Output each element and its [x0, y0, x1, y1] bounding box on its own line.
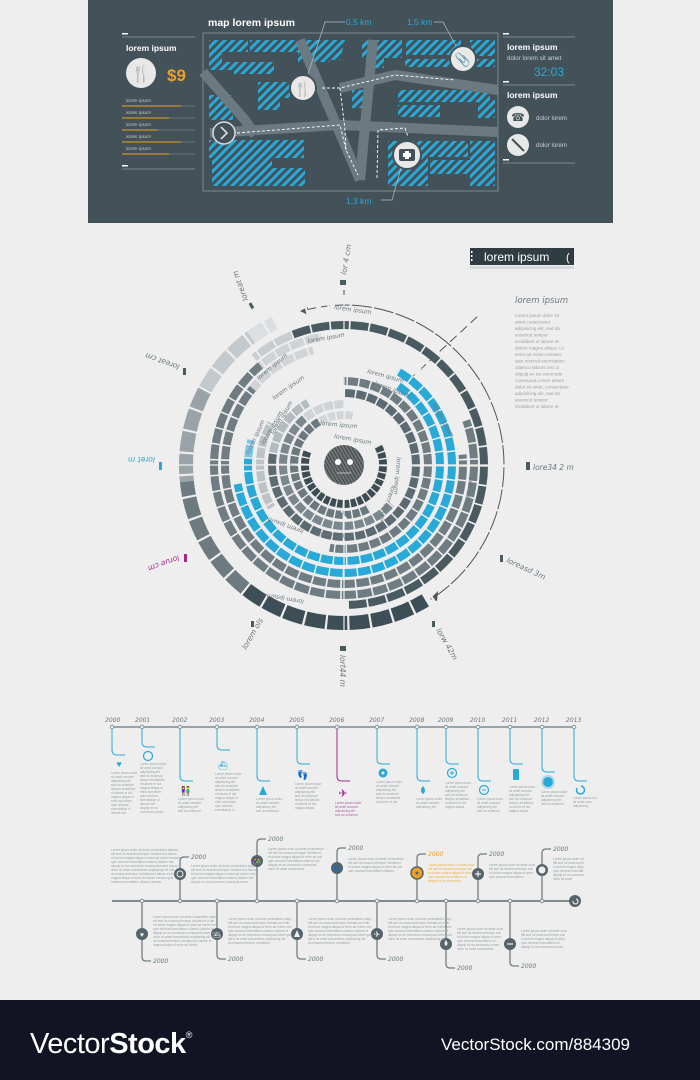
timeline 1 captions: Lorem ipsum dolor	[416, 797, 443, 801]
timeline 1 captions: adipisicing elit	[178, 805, 198, 809]
timeline 1: years: 2011	[502, 717, 517, 724]
radial annotations: loreat m	[231, 270, 250, 302]
timeline 1 captions: adipisicing	[573, 804, 588, 808]
timeline 1 captions: sit amet consect	[541, 794, 564, 798]
text block: right description: lorem ipsum	[515, 296, 568, 306]
timeline 1 captions: quis nostrud	[215, 804, 233, 808]
timeline 1 captions: Lorem ipsum dolor	[509, 785, 536, 789]
timeline 1 captions: sed do eiusmod	[335, 813, 358, 817]
timeline 2 text blocks: dolor sit amet consectetur adipisicing elit	[388, 937, 445, 941]
radial annotations: loret m	[128, 455, 155, 464]
timeline 1: years: 2009	[438, 717, 453, 724]
timeline 1 captions: Lorem ipsum dolor	[295, 782, 322, 786]
timeline 1 captions	[111, 762, 597, 817]
timeline 1 captions: commodo conse	[140, 810, 164, 814]
timeline 2 text blocks: elit sed do eiusmod tempor inci	[489, 867, 533, 871]
icon: restaurant pin: 🍴	[294, 81, 312, 98]
timeline 1 icons	[116, 752, 584, 800]
timeline 2 text blocks: et dolore magna aliqu	[553, 865, 584, 869]
timeline 2 text blocks: et dolore magna aliqua ut enim ad minim ven	[153, 923, 217, 927]
panel: map dashboard	[88, 0, 613, 223]
timeline 1 captions: sed do eiusmod	[215, 784, 238, 788]
radial annotations: loreat cm	[144, 351, 181, 372]
heading tag: lorem ipsum	[470, 248, 574, 269]
timeline 1 captions: sit amet consect	[215, 776, 238, 780]
timeline 1 captions: adipisicing elit	[111, 779, 131, 783]
timeline 1 captions: magna aliqua ut	[140, 786, 163, 790]
ring A	[122, 243, 566, 687]
timeline 2 text blocks: et dolore magna aliqua ut enim	[521, 937, 565, 941]
text block: right description: amet,consectetur	[515, 320, 551, 324]
timeline 1 captions: tempor incididunt	[111, 787, 135, 791]
timeline 1 captions: magna aliqua	[509, 809, 528, 813]
timeline 1 captions: adipisicing elit	[416, 805, 436, 809]
timeline 2 text blocks: elit sed do eiusmod tempor incididunt ut labore	[191, 868, 257, 872]
timeline 1 captions: sit amet cons	[573, 800, 592, 804]
timeline 1 captions: Lorem ipsum dol	[573, 796, 597, 800]
timeline 2 text blocks: Lorem ipsum dolor sit amet consectetur adip	[388, 917, 451, 921]
timeline 1 icons: 👣	[297, 769, 309, 781]
callouts: distances: 1,3 km	[346, 196, 372, 206]
timeline 1 captions: exercitation ul	[215, 808, 235, 812]
timeline 1: years: 2000	[105, 717, 120, 724]
timeline 1 captions: sed do eiusmod	[178, 809, 201, 813]
timeline 1 captions: exercitation ul	[111, 807, 131, 811]
callouts: distances: 1,5 km	[407, 17, 433, 27]
timeline 1 captions: Lorem ipsum dolor	[256, 797, 283, 801]
text block: right description: incididunt ut labore et	[515, 339, 559, 344]
chart: radial ring diagram	[122, 243, 566, 687]
radial annotations: lorw 42m	[434, 626, 460, 661]
timeline 1 captions: ut labore et dol	[140, 782, 161, 786]
text block: right description: adipisicing elit, sed do	[515, 391, 560, 396]
timeline 2 icons: ♥	[140, 932, 144, 939]
timeline 2 text blocks: et dolore magna aliqua ut enim ad minim veni	[191, 872, 256, 876]
timeline 1 captions: sit amet consect	[335, 805, 358, 809]
timeline 2 text blocks: dolor sit amet consectetur	[457, 947, 494, 951]
icon: phone: ☎	[511, 112, 525, 124]
text block: right description: dolore magna aliqua. Ut	[515, 346, 564, 350]
text block: right description: aliquip ex ea commodo	[515, 372, 563, 376]
timeline 1 captions: adipisicing elit	[215, 780, 235, 784]
timeline 1 captions: ut labore et dol	[376, 800, 397, 804]
timeline 1 captions: Lorem ipsum dolor	[445, 781, 472, 785]
map title: map lorem ipsum	[208, 17, 295, 29]
timeline 1 captions: Lorem ipsum dolor	[111, 771, 138, 775]
bars list: lorem ipsum	[126, 98, 151, 103]
right column: dolor lorem	[536, 115, 567, 122]
timeline 1 captions: sit amet consect	[509, 789, 532, 793]
timeline 1 captions: ut labore et dol	[295, 802, 316, 806]
timeline 2 text blocks: elit sed do eiusmod tempor incididunt ut labore	[111, 852, 177, 856]
timeline 1: years: 2013	[566, 717, 581, 724]
timeline 2 text blocks: dolor sit amet consectetur adipisicing elit	[153, 935, 210, 939]
timeline 2 text blocks: et dolore magna aliqua ut enim ad minim ven	[308, 925, 372, 929]
timeline 1 captions: enim ad minim	[140, 790, 161, 794]
timeline 1 icons: 👫	[180, 785, 192, 796]
timeline 2 text blocks: aliquip ex ea commodo	[428, 879, 461, 883]
timeline 2 text blocks: Lorem ipsum dolor sit amet consectetur adip	[228, 917, 291, 921]
ring labels: lorem ipsum	[392, 457, 402, 495]
timeline 2 icons: ✈	[374, 930, 381, 939]
timeline 1 captions: tempor incididunt	[509, 801, 533, 805]
timeline 1 captions: sed do eiusmod	[509, 797, 532, 801]
timeline 2 text blocks: et dolore magna aliqua ut enim ad minim veniam	[111, 856, 180, 860]
timeline 2 text blocks: Lorem ipsum dolor sit amet cons	[428, 863, 474, 867]
timeline 1 captions: sit amet consect	[477, 801, 500, 805]
timeline 2 text blocks: magna aliqua ut enim ad minim veniam quis	[111, 876, 174, 880]
timeline 1 captions: adipisicing elit	[335, 809, 355, 813]
radial annotations: loreasd 3m	[505, 556, 547, 582]
timeline 2 text blocks: aliquip ex ea commodo conse	[457, 943, 499, 947]
timeline 2 text blocks: do eiusmod tempor incididunt	[308, 941, 350, 945]
text block: right description: enim ad minim veniam,	[515, 352, 562, 357]
ring B	[147, 268, 541, 662]
timeline 2 text blocks: aliquip ex ea commodo consequat lorem	[191, 880, 249, 884]
timeline 2 text blocks: quis nostrud exercitation ullamco laboris ni	[308, 929, 368, 933]
timeline 1 captions: sed do eiusmod	[111, 783, 134, 787]
timeline 2 text blocks: et dolore magna aliqua ut enim	[428, 871, 472, 875]
timeline 1 captions: ut labore et dol	[215, 792, 236, 796]
timeline 1 captions: sed do eiusmod	[477, 809, 500, 813]
timeline 2 text blocks: magna aliqua ut enim ad minim	[153, 943, 198, 947]
timeline 1: years: 2004	[249, 717, 264, 724]
text block: right description: Lorem ipsum dolor sit	[515, 313, 560, 318]
timeline 2 text blocks: dolor sit amet consectetur	[268, 867, 305, 871]
heading tag: lorem ipsum: lorem ipsum	[484, 250, 549, 264]
radial annotations: lorem ols	[240, 616, 265, 651]
icon: cutlery: 🍴	[131, 64, 151, 83]
text block: right description: dolor sit amet, consectetur	[515, 384, 569, 390]
dashed guide arcs	[184, 290, 504, 625]
timeline 1 captions: sed do eiusmod	[295, 794, 318, 798]
timeline 1 captions: sit amet consect	[445, 785, 468, 789]
timeline 2 year labels: 2000	[489, 851, 504, 858]
timeline 1 captions: magna aliqua ut	[111, 795, 134, 799]
timeline 2 year labels: 2000	[308, 956, 323, 963]
text block: right description: consequat.Lorem ipsum	[515, 378, 564, 383]
timeline 1: years: 2010	[470, 717, 485, 724]
timeline 1 captions: sed do eiusmod	[541, 802, 564, 806]
timeline 2 text blocks: nostrud exercitation ullamco laboris	[111, 880, 161, 884]
ring labels: lorem ipsum	[430, 402, 455, 439]
right column: dolor lorem sit amet	[507, 55, 562, 62]
timeline 2 text blocks: elit sed do eiusmod tempor incididunt	[268, 851, 321, 855]
timeline 1 captions: quis nostrud	[111, 803, 129, 807]
bars list: lorem ipsum	[126, 146, 151, 151]
timeline 1 icons: ⛴	[218, 761, 228, 770]
timeline 2 year labels: 2000	[153, 958, 168, 965]
timeline 1 captions: ut labore et dol	[509, 805, 530, 809]
timeline 2 text blocks: Lorem ipsum dolor sit amet cons	[521, 929, 567, 933]
text block: right description: ullamco laboris nisi ut	[515, 365, 560, 370]
timeline 2 icons: ⛴	[213, 931, 221, 939]
timeline 1 icons: ♥	[116, 759, 122, 769]
timeline 2 year labels: 2000	[268, 836, 283, 843]
icon: pen	[507, 134, 529, 156]
timeline 1 captions: adipisicing elit	[445, 789, 465, 793]
icon: face	[324, 445, 364, 485]
timeline 2 text blocks: dolor sit amet	[553, 877, 572, 881]
timeline 1 captions: laboris nisi	[140, 802, 155, 806]
map	[203, 33, 498, 191]
timeline 1 captions: sed do eiusmod	[256, 809, 279, 813]
icon: arrow right	[213, 122, 235, 144]
timeline 1 captions: adipisicing elit	[477, 805, 497, 809]
timeline 1 captions: sit amet consect	[295, 786, 318, 790]
timeline 2 text blocks: elit sed do eiusmod tempor incididunt ut lab	[308, 921, 370, 925]
timeline 2 icons: 👣	[333, 865, 341, 873]
timeline 1 captions: adipisicing elit	[295, 790, 315, 794]
timeline 1: years	[105, 717, 597, 817]
radial annotations	[128, 244, 574, 687]
timeline 2 text blocks: quis nostrud exercitation ullamco lab	[268, 859, 320, 863]
ring labels: lorem ipsum	[244, 419, 267, 456]
timeline 2 text blocks: et dolore magna aliqua ut enim ad min	[348, 865, 402, 869]
timeline 1 captions: magna aliqua	[445, 805, 464, 809]
footer: watermark band: VectorStock	[30, 1028, 186, 1060]
ring labels: lorem ipsum	[314, 530, 352, 540]
bars list	[122, 98, 195, 154]
timeline 2 text blocks: quis nostrud exercitation ull	[428, 875, 467, 879]
timeline 1 captions: sed do eiusmod	[376, 792, 399, 796]
timeline 1: years: 2003	[209, 717, 224, 724]
timeline 2 text blocks: do eiusmod tempor incididunt ut labore et dol	[111, 872, 175, 876]
timeline 2 year labels: 2000	[228, 956, 243, 963]
timeline 1 captions: tempor incididunt	[445, 797, 469, 801]
timeline 1 captions: tempor incididunt	[215, 788, 239, 792]
timeline 2 text blocks: aliquip ex ea commodo consequat lorem ipsu	[228, 933, 292, 937]
timeline 2 text blocks: do eiusmod tempor incididunt	[228, 941, 270, 945]
timeline 2 text blocks: Lorem ipsum dolor sit	[553, 857, 584, 861]
timeline 1 captions: magna aliqua ut	[215, 796, 238, 800]
left column	[122, 33, 195, 169]
timeline 2 text blocks: elit sed do eiusmod tempor inci	[457, 931, 501, 935]
timeline 2 text blocks: quis nostrud exercitat	[553, 869, 583, 873]
ring labels: lorem ipsum	[256, 352, 289, 382]
icon: restaurant pin	[290, 75, 316, 101]
icon: clip pin	[450, 46, 476, 72]
timeline 2 text blocks: quis nostrud exercitation ullamco laboris nisi	[191, 876, 254, 880]
timeline 2 text blocks: et dolore magna aliqua ut enim ad min	[268, 855, 322, 859]
timeline 1: years: 2005	[289, 717, 304, 724]
timeline 1 captions: sit amet consect	[376, 784, 399, 788]
timeline 2 text blocks: elit sed do eiusmod te	[553, 861, 584, 865]
timeline 2 text blocks: aliquip ex ea commodo consequat lorem ipsum	[111, 864, 178, 868]
timeline 2 text blocks: quis nostrud exercitation ullamco laboris ni	[153, 927, 213, 931]
timeline 2 text blocks: Lorem ipsum dolor sit amet consectetur adipis	[191, 864, 256, 868]
timeline 1 captions: Lorem ipsum dolor	[376, 780, 403, 784]
timeline 2 text blocks: aliquip ex ea commodo conse	[521, 945, 563, 949]
text block: right description: quis nostrud exercitation	[515, 358, 565, 364]
timeline 2 text blocks: dolor sit amet consectetur adipisicing elit	[308, 937, 365, 941]
timeline 2 text blocks	[111, 847, 584, 951]
timeline 1 captions: Lorem ipsum dolor	[477, 797, 504, 801]
timeline 2 year labels: 2000	[521, 963, 536, 970]
timeline 1 captions: quis nostrud	[140, 794, 158, 798]
timeline 2 text blocks: et dolore magna aliqua ut enim	[489, 871, 533, 875]
timeline 1 captions: Lorem ipsum dolor	[178, 797, 205, 801]
timeline 2 text blocks: aliquip ex ea commodo consequat lorem ipsu	[308, 933, 372, 937]
ring labels: lorem ipsum	[366, 368, 405, 385]
timeline 1: years: 2002	[172, 717, 187, 724]
icon: medical kit	[393, 141, 421, 169]
timeline 1 captions: laboris nisi	[111, 811, 126, 815]
ring labels: lorem ipsum	[320, 420, 358, 430]
text block: right description: eiusmod tempor	[515, 332, 548, 338]
timeline 2 text blocks: elit sed do eiusmod tempor incididunt ut lab	[228, 921, 290, 925]
timeline 2 text blocks: dolor sit amet consectetur adipisicing elit	[228, 937, 285, 941]
timeline 1 captions: Lorem ipsum dolor	[335, 801, 362, 805]
timeline 2 year labels: 2000	[388, 956, 403, 963]
timeline 2 text blocks: do eiusmod tempor incididunt ut labore et	[153, 939, 212, 943]
timeline 1 icons: ✈	[338, 788, 348, 800]
ring labels: lorem ipsum	[267, 515, 305, 535]
timeline 2 text blocks: Lorem ipsum dolor sit amet consectetur	[268, 847, 325, 851]
ring labels: lorem ipsum	[266, 591, 304, 605]
timeline 2 text blocks: quis nostrud exercitation ull	[521, 941, 560, 945]
timeline 2 text blocks: aliquip ex ea commodo consequat	[268, 863, 316, 867]
footer: watermark band: VectorStock.com/884309	[441, 1035, 630, 1054]
timeline 2 year labels	[153, 836, 568, 972]
timeline 1 captions: sit amet consect	[111, 775, 134, 779]
callouts: distances	[308, 17, 456, 206]
ring labels: lorem ipsum	[271, 374, 306, 402]
timeline 1 captions: sed do eiusmod	[445, 793, 468, 797]
ring labels: lorem ipsum	[307, 332, 345, 345]
timeline 2 text blocks: dolor sit amet consectetur adipisicing elit sed	[111, 868, 174, 872]
timeline 2 text blocks: quis nostrud exercitation ull	[457, 939, 496, 943]
text block: right description: adipisicing elit, sed do	[515, 326, 560, 331]
radial annotations: lor 4 cm	[339, 244, 353, 275]
timeline 1 captions: adipisicing elit	[140, 770, 160, 774]
ring labels: lorem ipsum	[270, 400, 295, 436]
text block: right description: incididunt ut labore et	[515, 404, 559, 409]
timeline 1 captions: adipisicing elit	[541, 798, 561, 802]
radial annotations: lorue cm	[147, 553, 181, 573]
timeline 2 text blocks: quis nostrud exercitation ullamco laboris nisi	[111, 860, 174, 864]
radial annotations: lort44 m	[338, 655, 347, 687]
timeline 1: years: 2008	[409, 717, 424, 724]
radial annotations: lore34 2 m	[533, 463, 574, 472]
timeline 1 captions: adipisicing elit	[509, 793, 529, 797]
timeline 1 captions: exercitation ul	[140, 798, 160, 802]
timeline 1 captions: tempor incididunt	[295, 798, 319, 802]
bars list: lorem ipsum	[126, 134, 151, 139]
timeline 2 text blocks: et dolore magna aliqua ut enim ad minim ven	[388, 925, 452, 929]
timeline 1 captions: Lorem ipsum dolor	[140, 762, 167, 766]
timeline 2 text blocks: Lorem ipsum dolor sit amet cons	[489, 863, 535, 867]
timeline 2 icons	[136, 855, 581, 950]
timeline 1 captions: tempor incididunt	[140, 778, 164, 782]
timeline 2 text blocks: Lorem ipsum dolor sit amet consectetur adip	[308, 917, 371, 921]
right column: lorem ipsum	[507, 90, 558, 100]
ring labels: lorem ipsum	[334, 433, 372, 447]
timeline 2	[111, 836, 584, 972]
timeline 2 text blocks: quis nostrud exercitation ullamco	[348, 869, 395, 873]
timeline 2 text blocks: elit sed do eiusmod tempor inci	[428, 867, 472, 871]
right column	[503, 33, 575, 163]
timeline 1 captions: sit amet consect	[416, 801, 439, 805]
timeline 1 captions: enim ad minim	[215, 800, 236, 804]
timeline 1 captions: sit amet consect	[256, 801, 279, 805]
timeline 2 text blocks: Lorem ipsum dolor sit amet consectetur adipisic	[111, 848, 179, 852]
timeline 1 captions: Lorem ipsum dolor	[215, 772, 242, 776]
right column: lorem ipsum	[507, 42, 558, 52]
text block: right description	[515, 296, 569, 409]
ring labels: lorem ipsum	[464, 475, 474, 513]
right column: 32:03	[534, 65, 564, 79]
footer: watermark band: ®	[186, 1030, 193, 1040]
timeline 2 text blocks: quis nostrud exercitation ullamco laboris ni	[388, 929, 448, 933]
timeline 2 text blocks: elit sed do eiusmod tempor inci	[521, 933, 565, 937]
bars list: lorem ipsum	[126, 110, 151, 115]
timeline 2 text blocks: et dolore magna aliqua ut enim ad minim ven	[228, 925, 292, 929]
timeline 2 text blocks: et dolore magna aliqua ut enim	[457, 935, 501, 939]
timeline 1 captions: ut labore et dol	[111, 791, 132, 795]
timeline 2 text blocks: Lorem ipsum dolor sit amet consectetur adip	[153, 915, 216, 919]
timeline 2 text blocks: aliquip ex ea commodo consequat lorem ipsu	[153, 931, 217, 935]
timeline 1: years: 2007	[369, 717, 384, 724]
timeline 2 icons: 👫	[253, 857, 262, 866]
timeline 2 year labels: 2000	[348, 845, 363, 852]
right column: dolor lorem	[536, 142, 567, 149]
timeline 2 year labels: 2000	[428, 851, 443, 858]
timeline 1: years: 2006	[329, 717, 344, 724]
text block: right description: eiusmod tempor	[515, 398, 548, 402]
timeline 2 text blocks: Lorem ipsum dolor sit amet cons	[457, 927, 503, 931]
timeline 2 year labels: 2000	[457, 965, 472, 972]
timeline 1 captions: Lorem ipsum dolor	[541, 790, 568, 794]
timeline 1: years: 2001	[135, 717, 150, 724]
timeline 1 captions: tempor incididunt	[376, 796, 400, 800]
ring labels	[244, 304, 474, 605]
ring labels: lorem ipsum	[373, 380, 411, 400]
icon: clip pin: 📎	[455, 51, 471, 68]
timeline 2 text blocks: quis nostrud exercitation	[489, 875, 524, 879]
price: $9	[167, 66, 186, 85]
timeline 1 captions: adipisicing elit	[376, 788, 396, 792]
timeline 1 captions: adipisicing elit	[256, 805, 276, 809]
timeline 1 captions: sit amet consect	[178, 801, 201, 805]
timeline 2 text blocks: aliquip ex ea commodo consequat lorem ipsu	[388, 933, 452, 937]
timeline 1 captions: magna aliqua	[295, 806, 314, 810]
bars list: lorem ipsum	[126, 122, 151, 127]
timeline 2 year labels: 2000	[191, 854, 206, 861]
timeline 1 captions: aliquip ex ea	[140, 806, 158, 810]
left column: lorem ipsum	[126, 43, 177, 53]
timeline 2 text blocks: aliquip ex ea commod	[553, 873, 584, 877]
ring labels: lorem ipsum	[377, 484, 397, 522]
timeline 1 captions: enim ad minim	[111, 799, 132, 803]
timeline 2 text blocks: quis nostrud exercitation ullamco laboris ni	[228, 929, 288, 933]
ring labels: lorem ipsum	[260, 410, 285, 446]
callouts: distances: 0,5 km	[346, 17, 372, 27]
timeline 2 text blocks: elit sed do eiusmod tempor incididunt ut lab	[388, 921, 450, 925]
timeline 2 text blocks: Lorem ipsum dolor sit amet consectetur	[348, 857, 405, 861]
timeline 2 text blocks: elit sed do eiusmod tempor incididunt ut lab	[153, 919, 215, 923]
timeline 1 captions: sit amet consect	[140, 766, 163, 770]
timeline 1 captions: ut labore et dol	[445, 801, 466, 805]
heading tag: lorem ipsum: (	[566, 252, 570, 264]
ring labels: lorem ipsum	[334, 304, 372, 316]
timeline 2 year labels: 2000	[553, 846, 568, 853]
timeline 1: years: 2012	[534, 717, 549, 724]
footer: watermark band	[0, 1000, 700, 1080]
timeline 2 text blocks: elit sed do eiusmod tempor incididunt	[348, 861, 401, 865]
timeline 1 captions: sed do eiusmod	[140, 774, 163, 778]
